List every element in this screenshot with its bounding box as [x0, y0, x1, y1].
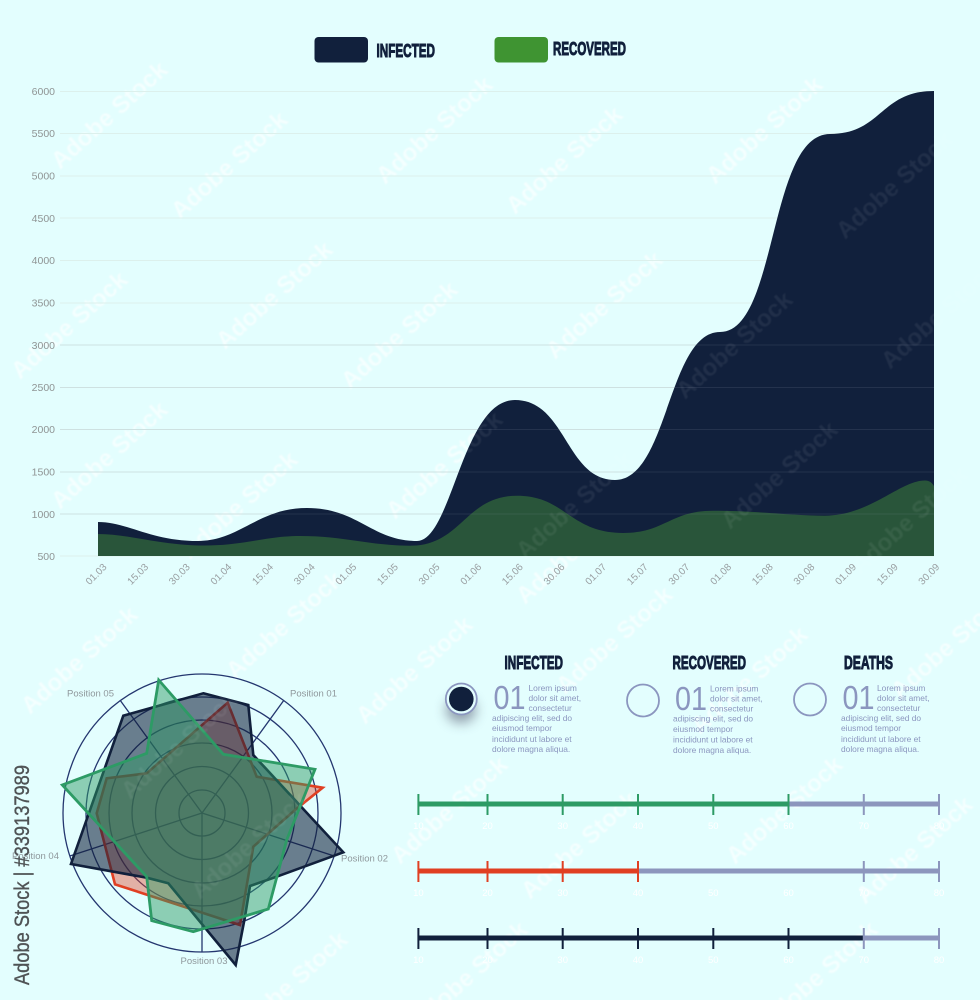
icon: empty radio [627, 684, 659, 716]
number: 01 [675, 680, 707, 717]
progress scale: red [413, 861, 944, 899]
x axis labels: 15.05 [375, 562, 401, 587]
stock watermarks on background: Adobe Stock [381, 406, 509, 524]
y axis labels: 6000 [32, 86, 55, 98]
stock watermarks over charts: Adobe Stock [846, 461, 974, 579]
side stock id: Adobe Stock | #339137989 [11, 765, 34, 985]
x axis labels: 15.08 [750, 562, 776, 587]
progress scale: green: 40 [633, 821, 643, 832]
stock watermarks over charts: Adobe Stock [831, 126, 959, 244]
x axis labels: 30.08 [792, 562, 818, 587]
progress scale: green: 80 [934, 821, 944, 832]
progress scale: green: 20 [482, 821, 493, 832]
progress scale: red: 70 [859, 888, 869, 899]
radar series: deaths [97, 703, 323, 925]
text block: dolore magna aliqua. [492, 744, 570, 754]
progress scale: green: 60 [783, 821, 794, 832]
radar labels: Position 04 [12, 851, 59, 862]
stock watermarks on background: Adobe Stock [351, 611, 479, 729]
progress scale: red: 40 [633, 888, 643, 899]
radar chart [12, 674, 388, 967]
text block: Lorem ipsum [528, 683, 577, 693]
radar labels [12, 688, 388, 967]
x axis labels: 01.03 [84, 562, 110, 587]
y axis labels: 4000 [32, 255, 55, 267]
stock watermarks on background: Adobe Stock [46, 396, 174, 514]
x axis labels: 15.06 [500, 562, 526, 587]
x axis labels: 01.05 [334, 562, 360, 587]
stock watermarks on background: Adobe Stock [541, 246, 669, 364]
number: 01 [842, 679, 874, 716]
stock watermarks on background: Adobe Stock [686, 621, 814, 739]
stock watermarks on background: Adobe Stock [701, 71, 829, 189]
progress scale: navy: 10 [413, 955, 424, 966]
progress scale: navy: 80 [934, 955, 944, 966]
radar labels: Position 02 [341, 854, 388, 864]
column: recovered [627, 652, 763, 755]
text block: eiusmod tempor [673, 724, 733, 734]
y axis labels: 4500 [32, 213, 55, 225]
progress scale: red: 60 [783, 888, 794, 899]
icon: empty radio [794, 684, 826, 716]
text block: consectetur [528, 703, 572, 713]
text block: Lorem ipsum [877, 683, 925, 693]
icon: selected radio [446, 684, 477, 723]
stock watermarks on background: Adobe Stock [516, 786, 644, 904]
text block: Lorem ipsum [710, 684, 758, 694]
heading: INFECTED [504, 652, 563, 673]
text block [673, 684, 763, 755]
stock watermarks over charts: Adobe Stock [511, 446, 639, 564]
progress scale: red: 20 [482, 888, 493, 899]
stock watermarks on background: Adobe Stock [166, 106, 294, 224]
heading: DEATHS [844, 652, 893, 673]
x axis labels: 01.08 [709, 562, 734, 587]
stock watermarks on background: Adobe Stock [176, 446, 304, 564]
progress scale: green: 70 [859, 821, 869, 832]
progress scale: navy: 40 [633, 955, 643, 966]
x axis labels: 30.03 [167, 562, 193, 587]
text block: incididunt ut labore et [492, 734, 572, 744]
text block: consectetur [710, 704, 754, 714]
progress scale: red: 80 [934, 888, 944, 899]
text block: adipiscing elit, sed do [492, 713, 572, 723]
progress scale: navy: 60 [783, 955, 794, 966]
stock watermarks over charts: Adobe Stock [671, 286, 799, 404]
x axis labels: 01.09 [833, 562, 859, 587]
y axis labels: 3000 [32, 340, 55, 352]
area chart [32, 86, 943, 587]
x axis labels: 30.06 [542, 562, 568, 587]
text block: adipiscing elit, sed do [673, 714, 753, 724]
y axis labels: 3500 [32, 298, 55, 310]
radar labels: Position 03 [180, 956, 228, 967]
progress scale: navy: 20 [482, 955, 493, 966]
stock watermarks on background: Adobe Stock [511, 491, 639, 609]
legend: infected: INFECTED [376, 40, 435, 61]
stock watermarks on background: Adobe Stock [371, 71, 499, 189]
y axis labels: 500 [37, 551, 55, 563]
y axis labels: 1500 [32, 466, 55, 478]
stock watermarks on background: Adobe Stock [721, 751, 849, 869]
text block [841, 683, 930, 754]
progress scale: green [413, 794, 944, 832]
text block: dolore magna aliqua. [841, 744, 919, 754]
progress scale: red: 10 [413, 888, 424, 899]
progress scale: red: 50 [708, 888, 719, 899]
radar series: recovered [62, 680, 315, 932]
x axis labels: 30.05 [417, 562, 443, 587]
stock watermarks on background: Adobe Stock [386, 751, 514, 869]
infected area [98, 91, 934, 556]
radar labels: Position 01 [290, 688, 337, 700]
stock watermarks on background: Adobe Stock [16, 601, 144, 719]
text block: dolor sit amet, [877, 693, 930, 703]
x axis labels: 01.04 [209, 562, 235, 587]
progress scale: navy [413, 928, 944, 966]
legend: infected [314, 37, 435, 62]
stock watermarks on background: Adobe Stock [6, 266, 134, 384]
stock watermarks on background: Adobe Stock [211, 236, 339, 354]
text block: incididunt ut labore et [673, 734, 753, 744]
y axis labels [32, 86, 55, 563]
x axis labels: 01.07 [584, 562, 609, 587]
text block: incididunt ut labore et [841, 734, 921, 744]
progress scale: navy: 50 [708, 955, 719, 966]
progress scale: green: 30 [557, 821, 568, 832]
legend [314, 37, 626, 62]
recovered area [98, 480, 934, 556]
y axis labels: 2500 [32, 382, 55, 394]
stock watermarks on background: Adobe Stock [221, 566, 349, 684]
radar labels: Position 05 [67, 688, 114, 700]
text block: consectetur [877, 703, 921, 713]
stock watermarks on background: Adobe Stock [46, 56, 174, 174]
progress scale: red: 30 [557, 888, 568, 899]
stock watermarks over charts: Adobe Stock [716, 416, 844, 534]
x axis labels: 15.07 [625, 562, 651, 587]
text block: dolore magna aliqua. [673, 745, 751, 755]
progress scale: navy: 30 [557, 955, 568, 966]
stock watermarks over charts: Adobe Stock [381, 406, 509, 524]
radar rings and spokes [63, 674, 341, 952]
x axis labels: 15.09 [875, 562, 901, 587]
stock watermarks on background: Adobe Stock [501, 101, 629, 219]
progress scale: green: 50 [708, 821, 719, 832]
heading: RECOVERED [672, 652, 746, 673]
y axis labels: 1000 [32, 509, 55, 521]
x axis labels: 15.04 [250, 562, 276, 587]
text block: eiusmod tempor [492, 723, 552, 733]
stock watermarks over charts: Adobe Stock [116, 686, 244, 804]
legend: recovered [494, 37, 626, 62]
text block: eiusmod tempor [841, 723, 901, 733]
y axis labels: 5000 [32, 170, 55, 182]
radar series: infected [71, 693, 343, 965]
legend: recovered: RECOVERED [553, 38, 626, 59]
stock watermarks on background: Adobe Stock [551, 581, 679, 699]
text block [492, 683, 581, 754]
x axis labels: 30.07 [667, 562, 693, 587]
text block: dolor sit amet, [528, 693, 581, 703]
x axis labels: 30.04 [292, 562, 318, 587]
y axis labels: 2000 [32, 424, 55, 436]
stock watermarks over charts [116, 126, 980, 904]
text block: dolor sit amet, [710, 694, 763, 704]
progress scale: navy: 70 [859, 955, 869, 966]
stock watermarks over charts: Adobe Stock [186, 786, 314, 904]
x axis labels: 15.03 [126, 562, 151, 587]
x axis labels: 01.06 [459, 562, 484, 587]
number: 01 [494, 679, 526, 716]
x axis labels [84, 562, 943, 587]
stock watermarks on background: Adobe Stock [336, 276, 464, 394]
column: infected [446, 652, 581, 754]
stock watermarks on background: Adobe Stock [851, 791, 979, 909]
text block: adipiscing elit, sed do [841, 713, 921, 723]
y axis labels: 5500 [32, 128, 55, 140]
x axis labels: 30.09 [917, 562, 943, 587]
column: deaths [794, 652, 930, 754]
progress scale: green: 10 [413, 821, 424, 832]
